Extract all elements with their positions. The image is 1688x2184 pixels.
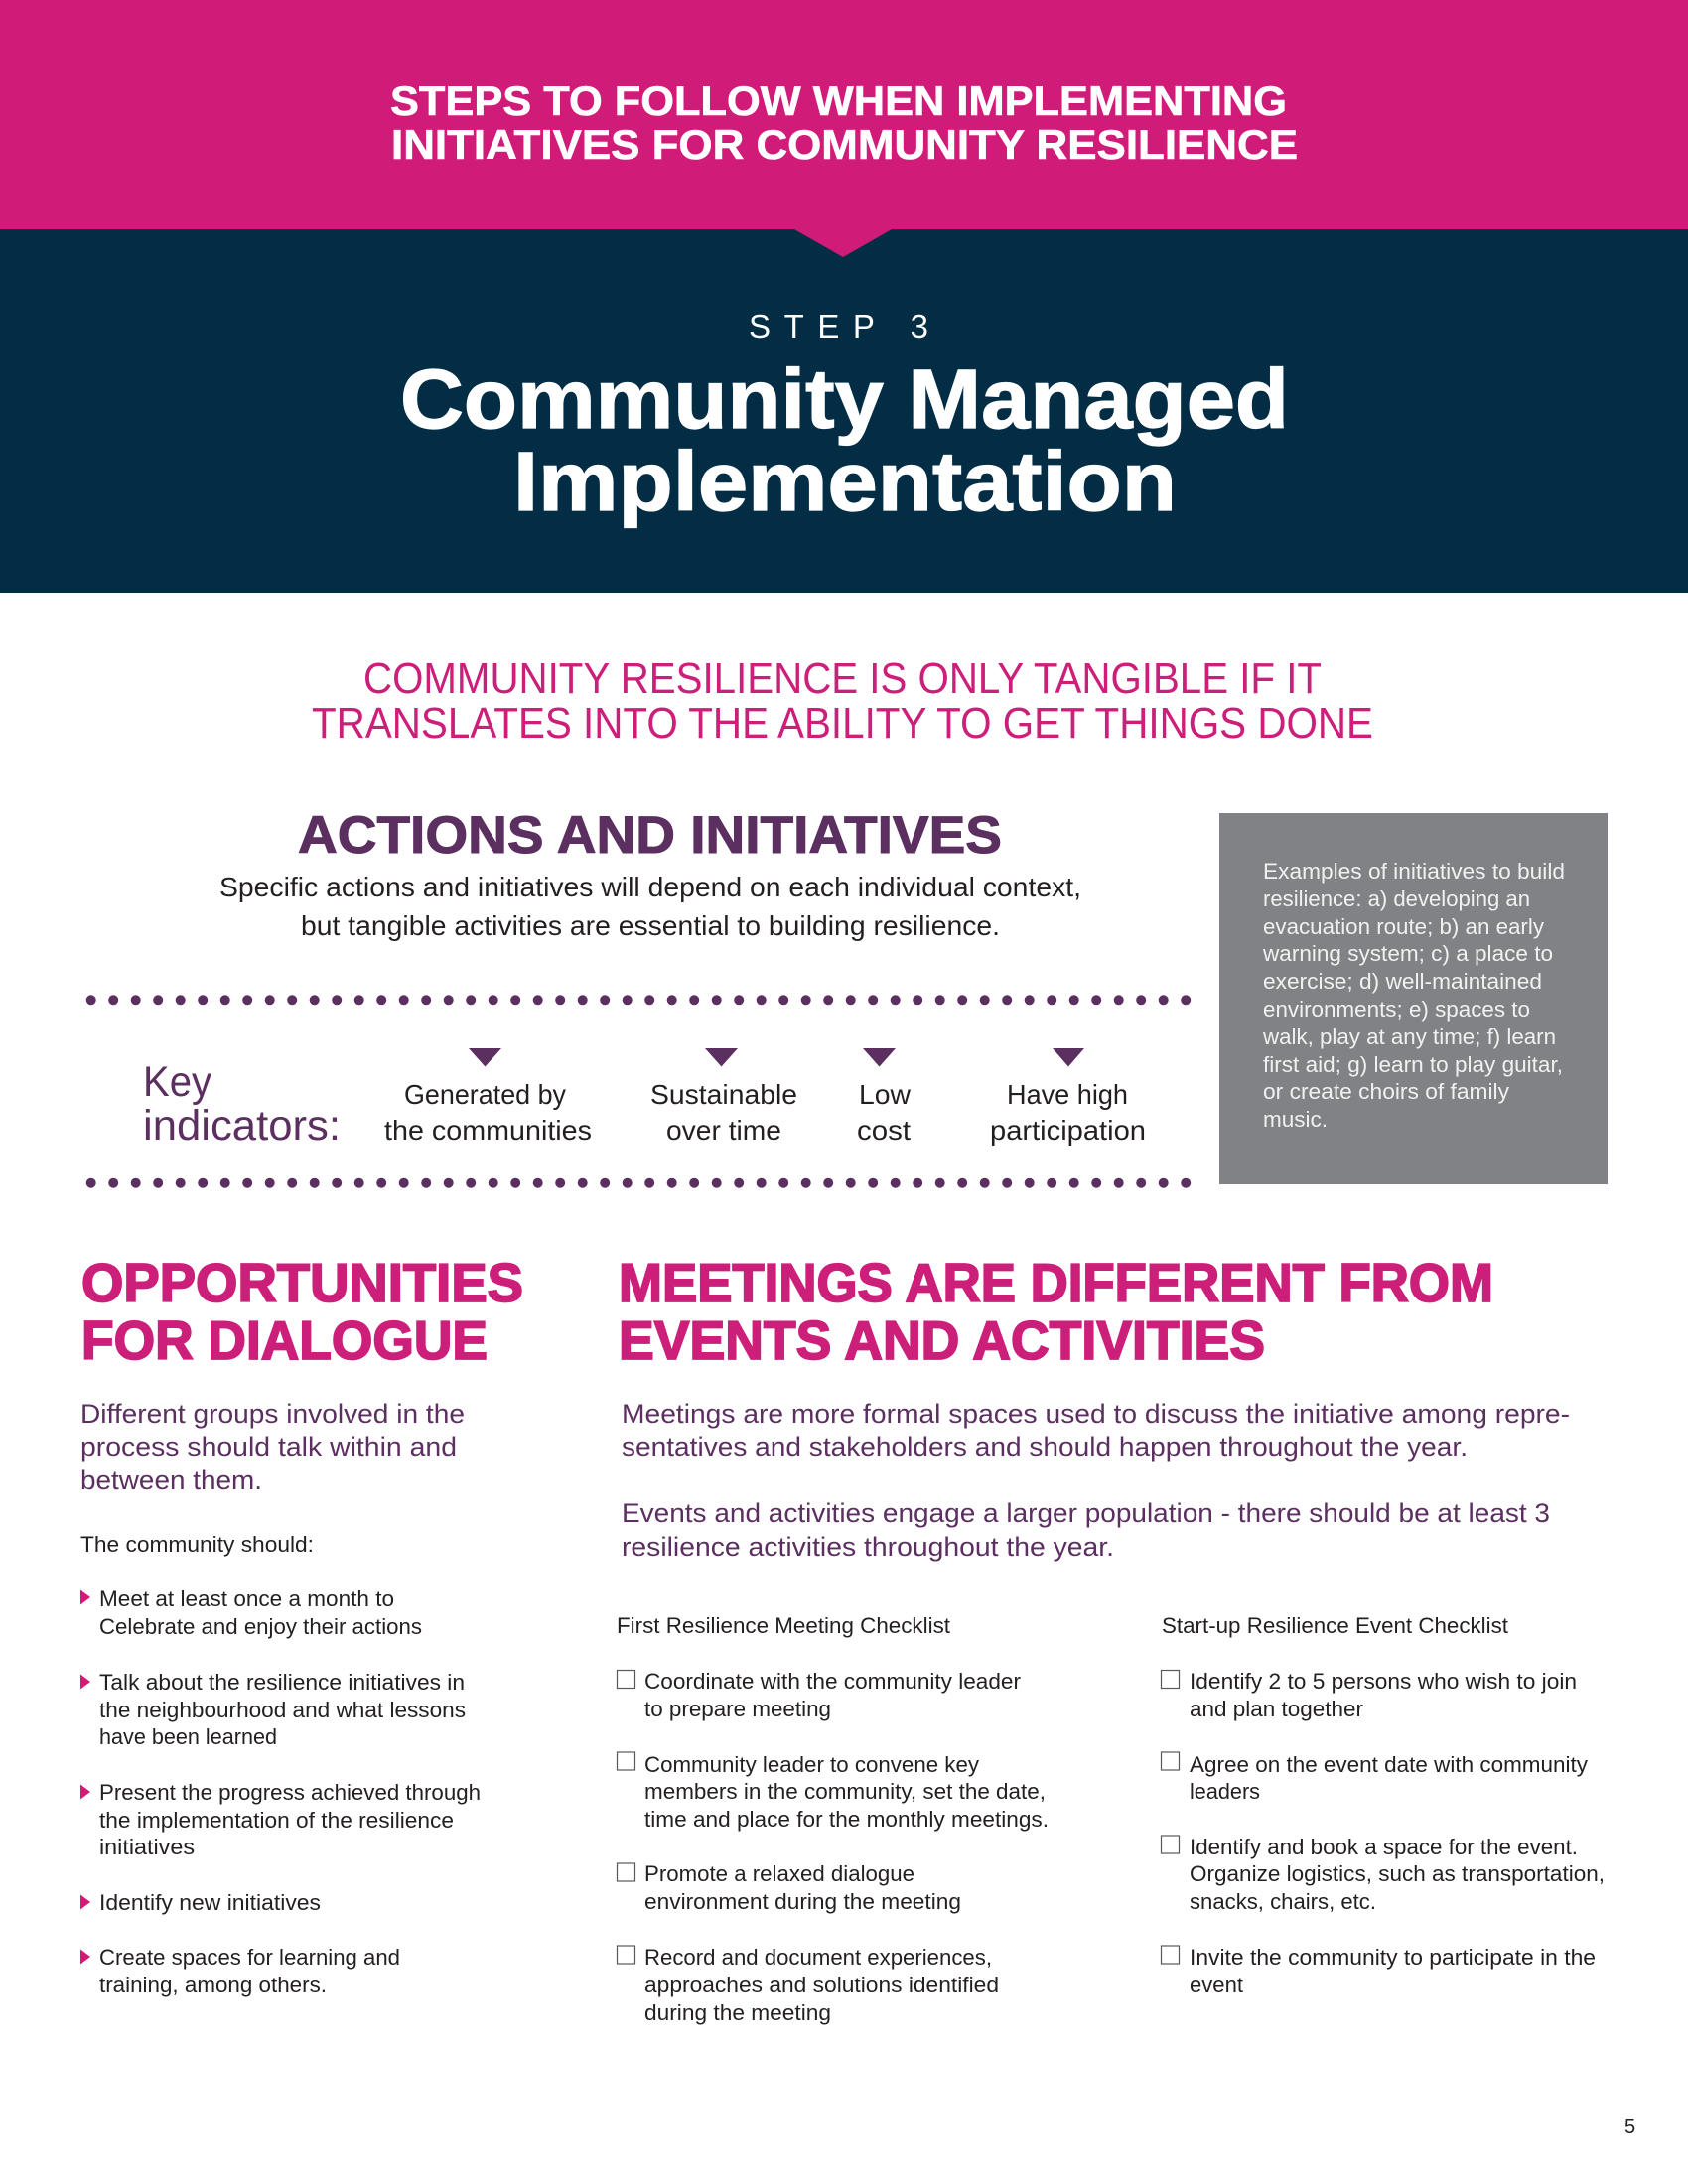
tagline: [312, 654, 1373, 748]
main title: Implementation: [513, 435, 1177, 528]
heading: opportunities for dialogue: [81, 1252, 523, 1371]
key indicators label: Key: [143, 1058, 211, 1106]
checklist: start-up resilience event: Start-up Resilience Event Checklist: [1162, 1613, 1508, 1638]
bullet: create spaces: Create spaces for learning and: [99, 1945, 400, 1970]
checklist: first resilience meeting: [617, 1613, 1049, 2025]
text block: actions intro: Specific actions and initiatives will depend on each individual context,: [219, 872, 1081, 902]
indicator: generated by the communities: Generated by: [404, 1079, 566, 1110]
panel: examples of initiatives: warning system; c) a place to: [1262, 941, 1553, 966]
panel: pink header band: [0, 0, 1688, 229]
indicator: sustainable over time: Sustainable: [650, 1079, 797, 1110]
checklist item: relaxed dialogue: Promote a relaxed dialogue: [644, 1861, 914, 1886]
text block: meetings description: resilience activities throughout the year.: [622, 1532, 1114, 1562]
bullet: present progress: the implementation of the resilience: [99, 1808, 454, 1833]
text: the community should: The community should:: [80, 1532, 314, 1557]
indicator: have high participation: participation: [990, 1115, 1146, 1146]
checklist item: agree on date: leaders: [1190, 1779, 1260, 1804]
header title: [390, 77, 1298, 168]
checklist item: relaxed dialogue: environment during the meeting: [644, 1889, 961, 1914]
text block: dialogue intro: Different groups involved in the: [80, 1399, 465, 1429]
tagline: TRANSLATES INTO THE ABILITY TO GET THINGS DONE: [312, 699, 1373, 748]
heading: actions and initiatives: ACTIONS AND INITIATIVES: [298, 806, 1002, 865]
main title: [400, 352, 1289, 528]
checklist item: coordinate: to prepare meeting: [644, 1697, 831, 1721]
text block: actions intro: but tangible activities are essential to building resilience.: [301, 910, 1000, 941]
checklist item: record experiences: approaches and solutions identified: [644, 1973, 999, 1997]
panel: navy step banner: [0, 229, 1688, 593]
checklist item: book a space: snacks, chairs, etc.: [1190, 1889, 1376, 1914]
checklist item: coordinate: [618, 1669, 1021, 1721]
heading: opportunities for dialogue: FOR DIALOGUE: [81, 1309, 488, 1371]
bullet: talk about initiatives: the neighbourhood and what lessons: [99, 1698, 466, 1722]
checklist: first resilience meeting: First Resilience Meeting Checklist: [617, 1613, 950, 1638]
tagline: COMMUNITY RESILIENCE IS ONLY TANGIBLE IF IT: [363, 654, 1322, 703]
panel: examples of initiatives: resilience: a) developing an: [1263, 887, 1530, 911]
list: community actions: [80, 1586, 481, 1997]
checklist item: invite community: event: [1190, 1973, 1243, 1997]
main title: Community Managed: [400, 352, 1289, 446]
indicator: low cost: [857, 1048, 912, 1146]
text block: meetings description: Meetings are more formal spaces used to discuss the initiative among repre-: [622, 1399, 1570, 1429]
heading: meetings are different: EVENTS AND ACTIVITIES: [619, 1309, 1265, 1371]
indicator: low cost: Low: [859, 1079, 912, 1110]
bullet: talk about initiatives: have been learned: [99, 1724, 277, 1749]
checklist item: convene: [618, 1752, 1049, 1832]
panel: examples of initiatives: Examples of initiatives to build: [1263, 859, 1565, 884]
indicator: have high participation: [990, 1048, 1146, 1146]
checklist item: invite community: [1162, 1945, 1596, 1997]
checklist item: coordinate: Coordinate with the community leader: [644, 1669, 1021, 1694]
text block: dialogue intro: [80, 1399, 465, 1495]
arrow: pink pointer: [794, 229, 892, 257]
bullet: talk about initiatives: Talk about the resilience initiatives in: [99, 1670, 465, 1695]
bullet: talk about initiatives: [80, 1670, 466, 1749]
checklist item: agree on date: Agree on the event date with community: [1190, 1752, 1588, 1777]
indicator: have high participation: Have high: [1007, 1079, 1128, 1110]
panel: examples of initiatives: environments; e) spaces to: [1263, 997, 1530, 1022]
checklist item: relaxed dialogue: [618, 1861, 961, 1914]
header title: STEPS TO FOLLOW WHEN IMPLEMENTING: [390, 77, 1287, 124]
indicator: low cost: cost: [857, 1115, 911, 1146]
bullet: present progress: Present the progress achieved through: [99, 1780, 481, 1805]
checklist: start-up resilience event: [1162, 1613, 1605, 1997]
bullet: identify new initiatives: Identify new initiatives: [99, 1890, 321, 1915]
text block: dialogue intro: between them.: [80, 1465, 262, 1495]
key indicators label: indicators:: [143, 1102, 341, 1150]
checklist item: record experiences: during the meeting: [644, 2000, 831, 2025]
panel: examples of initiatives: evacuation route; b) an early: [1263, 914, 1545, 939]
checklist item: book a space: [1162, 1835, 1605, 1914]
checklist item: record experiences: [618, 1945, 999, 2025]
text block: meetings description: sentatives and stakeholders and should happen throughout the year.: [622, 1433, 1468, 1462]
step label: STEP 3: [749, 308, 928, 344]
panel: examples of initiatives: exercise; d) well-maintained: [1263, 969, 1542, 994]
panel: examples of initiatives: [1219, 813, 1608, 1184]
bullet: meet monthly: Meet at least once a month to: [99, 1586, 394, 1611]
checklist item: convene: Community leader to convene key: [644, 1752, 979, 1777]
text block: actions intro: [219, 872, 1081, 941]
bullet: present progress: initiatives: [99, 1835, 195, 1859]
checklist item: record experiences: Record and document experiences,: [644, 1945, 992, 1970]
text block: dialogue intro: process should talk within and: [80, 1433, 457, 1462]
key indicators label: [143, 1058, 341, 1150]
checklist item: identify persons: and plan together: [1190, 1697, 1363, 1721]
heading: meetings are different: MEETINGS ARE DIFFERENT FROM: [619, 1252, 1493, 1313]
page number: 5: [1624, 2116, 1635, 2138]
checklist item: book a space: Identify and book a space for the event.: [1190, 1835, 1578, 1859]
checklist item: agree on date: [1162, 1752, 1588, 1804]
text block: meetings description: Events and activities engage a larger population - there should be at least 3: [622, 1498, 1550, 1528]
heading: meetings are different: [619, 1252, 1493, 1371]
bullet: meet monthly: [80, 1586, 422, 1639]
text block: meetings description: [622, 1399, 1570, 1562]
checklist item: identify persons: [1162, 1669, 1577, 1721]
panel: examples of initiatives: walk, play at any time; f) learn: [1262, 1024, 1556, 1049]
bullet: create spaces: training, among others.: [99, 1973, 327, 1997]
checklist item: convene: members in the community, set the date,: [644, 1779, 1046, 1804]
indicator: generated by the communities: [384, 1048, 592, 1146]
checklist item: invite community: Invite the community to participate in the: [1190, 1945, 1596, 1970]
panel: examples of initiatives: music.: [1263, 1107, 1328, 1132]
indicator: sustainable over time: [650, 1048, 797, 1146]
panel: examples of initiatives: or create choirs of family: [1263, 1079, 1510, 1104]
checklist item: convene: time and place for the monthly meetings.: [644, 1807, 1049, 1832]
panel: examples of initiatives: first aid; g) learn to play guitar,: [1263, 1052, 1563, 1077]
heading: opportunities for dialogue: OPPORTUNITIES: [81, 1252, 523, 1313]
indicator: generated by the communities: the communities: [384, 1115, 592, 1146]
checklist item: book a space: Organize logistics, such as transportation,: [1190, 1861, 1605, 1886]
header title: INITIATIVES FOR COMMUNITY RESILIENCE: [391, 121, 1298, 168]
indicator: sustainable over time: over time: [666, 1115, 781, 1146]
checklist item: identify persons: Identify 2 to 5 persons who wish to join: [1190, 1669, 1577, 1694]
bullet: create spaces: [80, 1945, 400, 1997]
bullet: meet monthly: Celebrate and enjoy their actions: [99, 1614, 422, 1639]
bullet: present progress: [80, 1780, 481, 1859]
